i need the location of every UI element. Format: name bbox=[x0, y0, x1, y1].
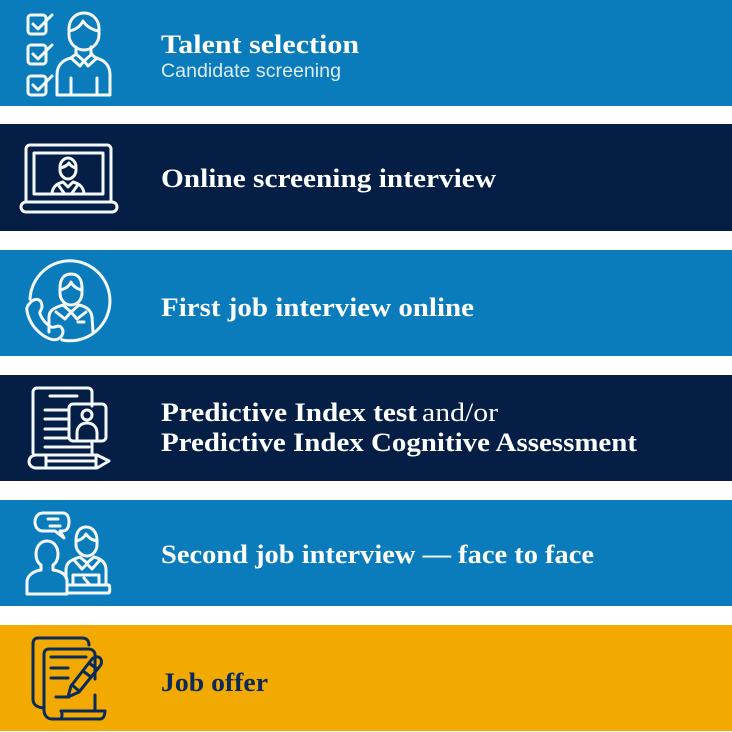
text: predictive index lines: and/or bbox=[422, 398, 498, 427]
panel: predictive index bbox=[0, 375, 732, 481]
panel: talent selection bbox=[0, 0, 732, 106]
icon: document with profile and pencil bbox=[29, 388, 109, 468]
icon: laptop video call bbox=[21, 145, 117, 212]
heading: job offer: Job offer bbox=[161, 668, 268, 697]
text: predictive index lines: Predictive Index test bbox=[161, 398, 417, 427]
panel: first job interview online bbox=[0, 250, 732, 356]
icon: face to face interview bbox=[27, 513, 110, 594]
text: predictive index lines bbox=[161, 398, 637, 457]
heading: first job interview online: First job interview online bbox=[161, 293, 474, 322]
panel: online screening interview bbox=[0, 124, 732, 231]
icon: checklist and candidate bbox=[28, 13, 110, 95]
text: candidate screening: Candidate screening bbox=[161, 61, 341, 82]
heading: online screening interview: Online screening interview bbox=[161, 164, 496, 193]
panel: second job interview bbox=[0, 500, 732, 606]
heading: talent selection: Talent selection bbox=[161, 30, 360, 59]
text: predictive index lines: Predictive Index Cognitive Assessment bbox=[161, 428, 637, 457]
icon: phone interview circle bbox=[27, 261, 110, 341]
heading: second job interview: Second job interview — face to face bbox=[161, 540, 594, 569]
panel: job offer bbox=[0, 625, 732, 731]
icon: contract and pen bbox=[33, 638, 105, 719]
